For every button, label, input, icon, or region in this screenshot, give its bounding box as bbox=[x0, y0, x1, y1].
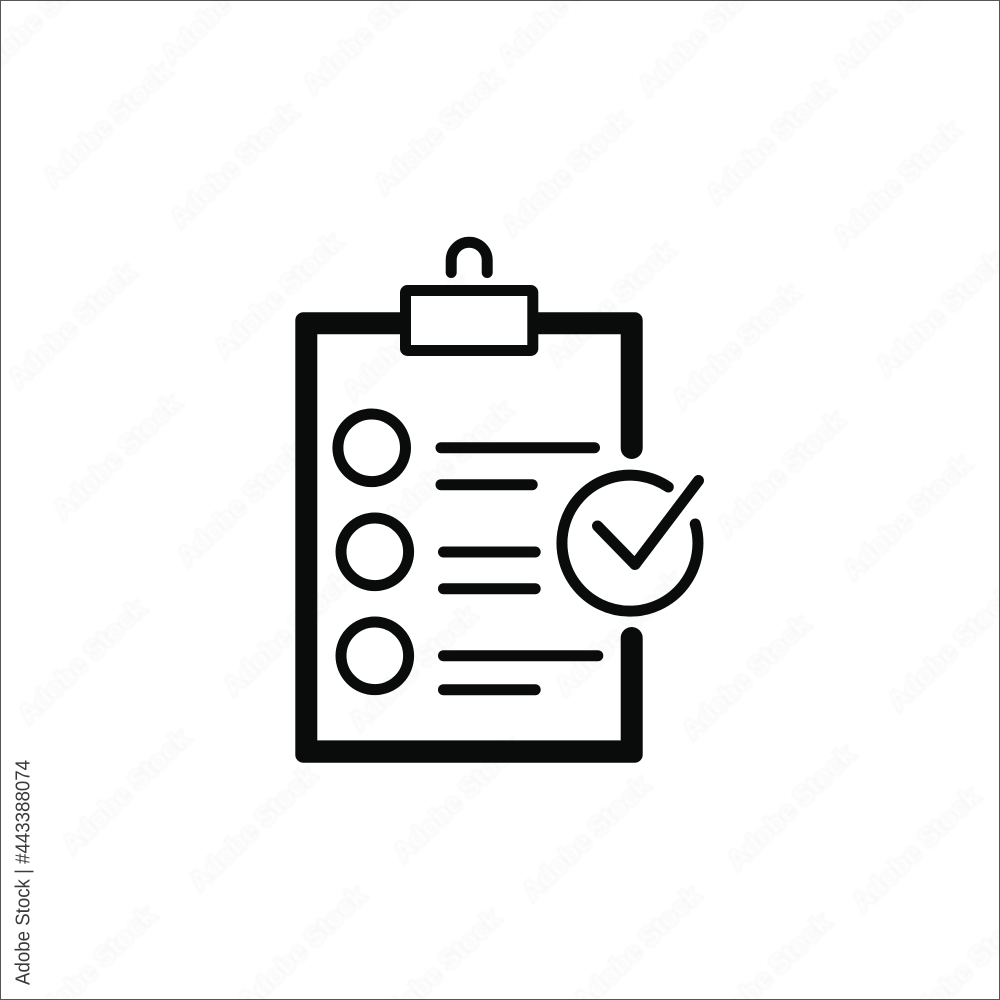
watermark pattern: Adobe Stock bbox=[516, 770, 656, 907]
watermark pattern: Adobe Stock bbox=[208, 227, 348, 364]
watermark pattern: Adobe Stock bbox=[183, 760, 323, 897]
watermark pattern: Adobe Stock bbox=[846, 781, 986, 918]
watermark pattern: Adobe Stock bbox=[700, 73, 840, 210]
watermark pattern: Adobe Stock bbox=[837, 449, 977, 586]
watermark pattern: Adobe Stock bbox=[379, 395, 519, 532]
checklist row 2 bbox=[341, 518, 535, 589]
watermark pattern: Adobe Stock bbox=[541, 235, 681, 372]
watermark pattern: Adobe Stock bbox=[2, 257, 142, 394]
watermark pattern: Adobe Stock bbox=[12, 593, 152, 730]
approval badge bbox=[562, 475, 698, 611]
watermark pattern: Adobe Stock bbox=[711, 405, 851, 542]
watermark pattern: Adobe Stock bbox=[827, 115, 967, 252]
watermark pattern: Adobe Stock bbox=[171, 435, 311, 572]
watermark pattern: Adobe Stock bbox=[549, 565, 689, 702]
watermark pattern: Adobe Stock bbox=[368, 63, 508, 200]
row 2 bullet bbox=[341, 518, 409, 586]
check mark bbox=[598, 480, 698, 564]
row 3 short line bbox=[444, 684, 535, 695]
row 1 short line bbox=[441, 479, 532, 490]
watermark pattern: Adobe Stock bbox=[217, 565, 357, 702]
watermark pattern: Adobe Stock bbox=[721, 739, 861, 876]
watermark pattern: Adobe Stock bbox=[337, 270, 477, 407]
watermark pattern: Adobe Stock bbox=[47, 388, 187, 525]
clip hook bbox=[451, 242, 487, 272]
watermark pattern: Adobe Stock bbox=[387, 731, 527, 868]
row 3 bullet bbox=[341, 622, 409, 690]
checklist row 3 bbox=[341, 622, 598, 690]
badge ring bbox=[562, 475, 698, 611]
clipboard icon bbox=[295, 242, 698, 763]
watermark pattern: Adobe Stock bbox=[666, 278, 806, 415]
row 3 long line bbox=[444, 650, 598, 661]
watermark pattern: Adobe Stock bbox=[496, 105, 636, 242]
row 1 long line bbox=[441, 442, 594, 453]
checklist row 1 bbox=[338, 414, 594, 485]
watermark pattern: Adobe Stock bbox=[164, 97, 304, 234]
row 1 bullet bbox=[338, 414, 406, 482]
row 2 second line bbox=[444, 583, 535, 594]
clipboard board frame bbox=[295, 312, 643, 763]
row 2 first line bbox=[444, 546, 535, 558]
watermark pattern: Adobe Stock bbox=[343, 600, 483, 737]
watermark pattern: Adobe Stock bbox=[56, 723, 196, 860]
watermark pattern: Adobe Stock bbox=[37, 56, 177, 193]
watermark pattern: Adobe Stock bbox=[676, 609, 816, 746]
clip body bbox=[406, 290, 533, 350]
side credit text: Adobe Stock | #443388074 bbox=[12, 760, 34, 985]
